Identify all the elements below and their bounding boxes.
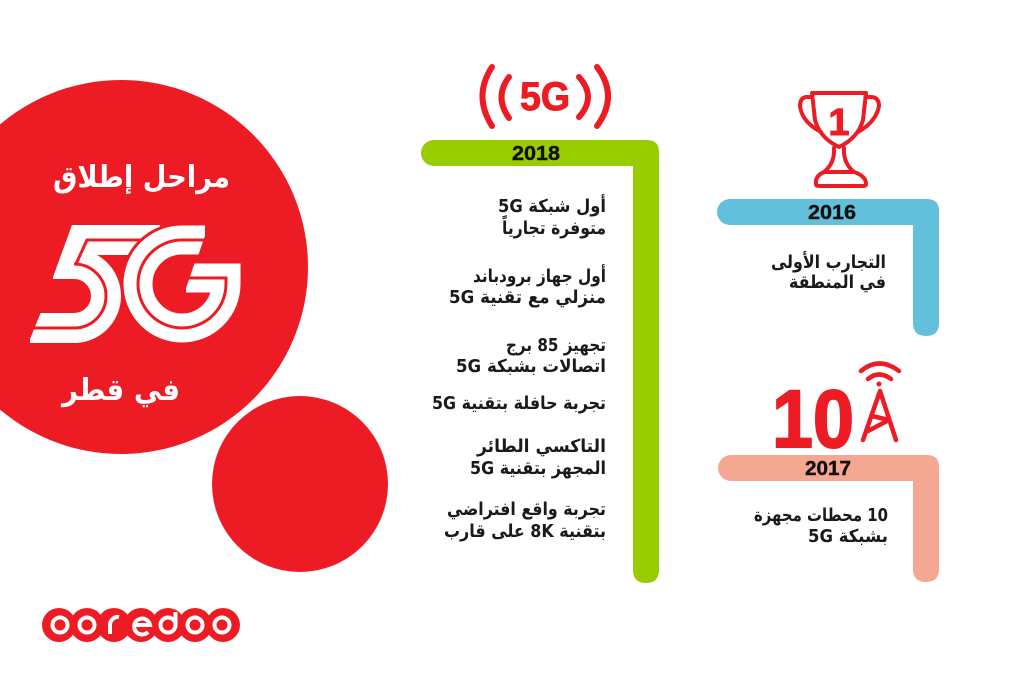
text: 10 stations: 10 محطات مجهزة — [754, 505, 888, 526]
item: 85 towers: اتصالات بشبكة 5G — [456, 356, 606, 377]
timeline bar: 2016 — [717, 199, 939, 336]
item: VR on a boat: تجربة واقع افتراضي — [447, 499, 606, 520]
icon: trophy — [800, 93, 879, 186]
timeline bar: 2018 — [421, 140, 659, 583]
text list: 2018 milestones — [432, 194, 606, 542]
icon: trophy: 1 — [828, 102, 850, 144]
icon: 5G signal — [482, 67, 608, 126]
logo: 5G — [20, 224, 226, 344]
item: 85 towers: تجهيز 85 برج — [506, 335, 606, 356]
icon: 10 towers — [772, 364, 899, 465]
timeline bar: 2017 — [718, 455, 939, 582]
text: first trials in the region — [771, 251, 886, 293]
item: bus trial: تجربة حافلة بتقنية 5G — [432, 393, 606, 414]
item: first broadband device — [449, 264, 606, 308]
item: first broadband device: منزلي مع تقنية 5G — [449, 287, 606, 308]
item: first commercial network: متوفرة تجارياً — [502, 215, 606, 239]
panel: hero circle — [0, 80, 308, 454]
year: 2016: 2016 — [808, 202, 856, 224]
heading: milestones of launching: مراحل إطلاق — [53, 160, 230, 195]
heading: in Qatar: في قطر — [60, 373, 180, 408]
text: 10 stations: بشبكة 5G — [808, 526, 888, 547]
item: first commercial network: أول شبكة 5G — [498, 194, 606, 217]
decorative circle — [212, 396, 388, 572]
item: 85 towers — [456, 335, 606, 377]
item: first commercial network — [498, 194, 606, 239]
item: flying taxi: المجهز بتقنية 5G — [470, 458, 606, 479]
icon: 10 towers: 10 — [772, 374, 854, 465]
year: 2018: 2018 — [512, 143, 560, 165]
year: 2017: 2017 — [805, 458, 851, 480]
item: VR on a boat: بتقنية 8K على قارب — [444, 521, 606, 542]
logo: ooredoo — [42, 608, 240, 642]
item: flying taxi — [470, 436, 606, 479]
item: first broadband device: أول جهاز برودباند — [473, 264, 606, 287]
text: first trials in the region: التجارب الأولى — [771, 251, 886, 273]
text: first trials in the region: في المنطقة — [789, 272, 886, 293]
item: flying taxi: التاكسي الطائر — [476, 436, 606, 457]
item: VR on a boat — [444, 499, 606, 542]
icon: 5G signal: 5G — [520, 75, 570, 119]
text: 10 stations — [754, 505, 888, 547]
